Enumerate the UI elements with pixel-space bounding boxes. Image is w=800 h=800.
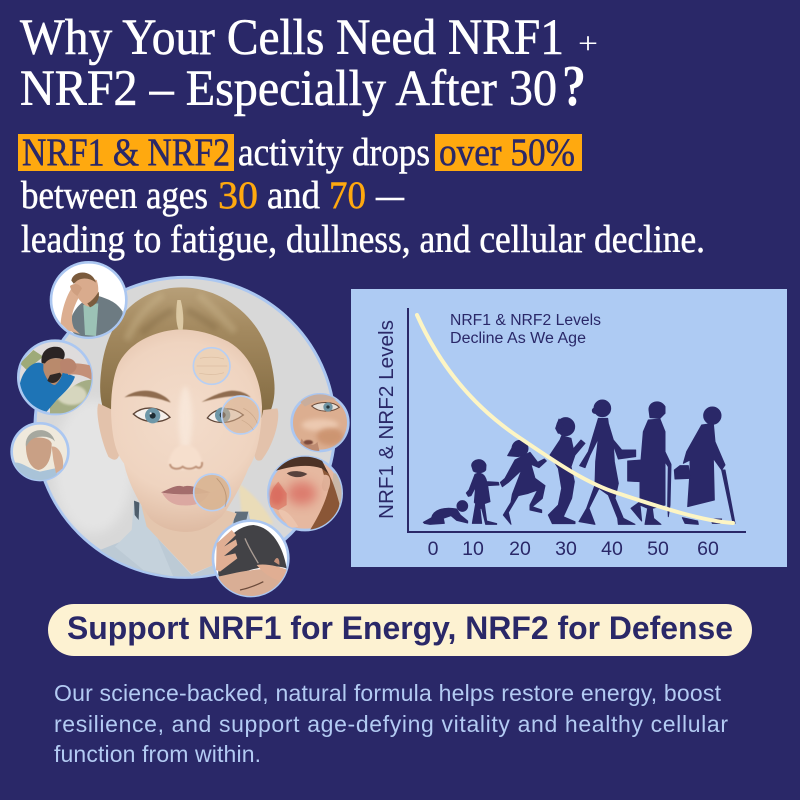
x axis ticks: 60: [697, 538, 719, 560]
title: [20, 10, 598, 118]
x axis ticks: 30: [555, 538, 577, 560]
subheading: decline statistic: NRF1 & NRF2: [22, 131, 230, 174]
face: [111, 329, 262, 532]
photo: older man holding head: [12, 423, 68, 483]
silhouette: girl: [548, 418, 585, 524]
chart title: Decline As We Age: [450, 330, 586, 347]
silhouette: running child: [500, 440, 546, 524]
photo: hair loss scalp: [213, 521, 288, 597]
silhouette: woman with clutch: [579, 400, 636, 524]
portrait cluster: [12, 262, 348, 597]
x axis ticks: 50: [647, 538, 669, 560]
body text: resilience, and support age-defying vitality and healthy cellular: [54, 711, 728, 737]
skin detail lens: mouth wrinkles: [194, 474, 230, 511]
silhouettes: child stages: [423, 418, 585, 524]
photo: exhausted man in blue shirt: [18, 341, 93, 414]
facial features: [124, 387, 251, 505]
silhouette: elderly woman with cane: [674, 407, 735, 524]
body text: function from within.: [54, 741, 261, 767]
skin detail lens: eye wrinkles: [222, 396, 260, 434]
skin detail lens: forehead: [193, 348, 230, 384]
photo: close-up of eye wrinkles: [292, 393, 348, 453]
axes: [408, 308, 746, 532]
x axis ticks: 0: [428, 538, 439, 560]
body text: Our science-backed, natural formula helps restore energy, boost: [54, 680, 722, 706]
subheading: decline statistic: 30: [218, 174, 258, 217]
subheading: decline statistic: [18, 131, 705, 261]
chart title: [450, 312, 601, 347]
subheading: decline statistic: leading to fatigue, dullness, and cellular decline.: [21, 218, 705, 261]
ears: [97, 403, 120, 460]
title: ?: [562, 53, 586, 118]
title: +: [578, 27, 598, 60]
main portrait circle: [35, 277, 335, 583]
silhouette: toddler: [466, 460, 499, 524]
shirt: [100, 512, 250, 576]
hair parting highlights: [176, 300, 183, 330]
neck: [140, 500, 237, 574]
title: Why Your Cells Need NRF1: [20, 10, 564, 66]
subheading: decline statistic: over 50%: [439, 131, 575, 174]
hair: [100, 287, 275, 423]
subheading: decline statistic: and: [267, 174, 320, 217]
photo: woman with facial redness: [267, 457, 343, 530]
highlight: over 50%: [435, 134, 582, 171]
silhouette: baby: [423, 501, 468, 524]
subheading: decline statistic: —: [375, 174, 405, 217]
body text: [54, 680, 728, 767]
panel: NRF levels decline chart: [351, 289, 787, 567]
x axis ticks: 10: [462, 538, 484, 560]
y axis label: NRF1 & NRF2 Levels: [375, 320, 398, 519]
silhouettes: adult stages: [579, 400, 735, 524]
silhouette: woman with bag and umbrella: [628, 402, 671, 524]
callout pill: [48, 604, 752, 656]
x axis ticks: 20: [509, 538, 531, 560]
decline curve: [417, 315, 733, 523]
x axis ticks: [428, 538, 719, 560]
callout pill: Support NRF1 for Energy, NRF2 for Defense: [67, 610, 733, 646]
title: NRF2 – Especially After 30: [20, 61, 557, 117]
highlight: NRF1 & NRF2: [18, 134, 234, 171]
x axis ticks: 40: [601, 538, 623, 560]
photo: man with headache: [51, 262, 126, 340]
subheading: decline statistic: activity drops: [238, 131, 430, 174]
subheading: decline statistic: between ages: [21, 174, 208, 217]
chart title: NRF1 & NRF2 Levels: [450, 312, 601, 329]
subheading: decline statistic: 70: [329, 174, 366, 217]
